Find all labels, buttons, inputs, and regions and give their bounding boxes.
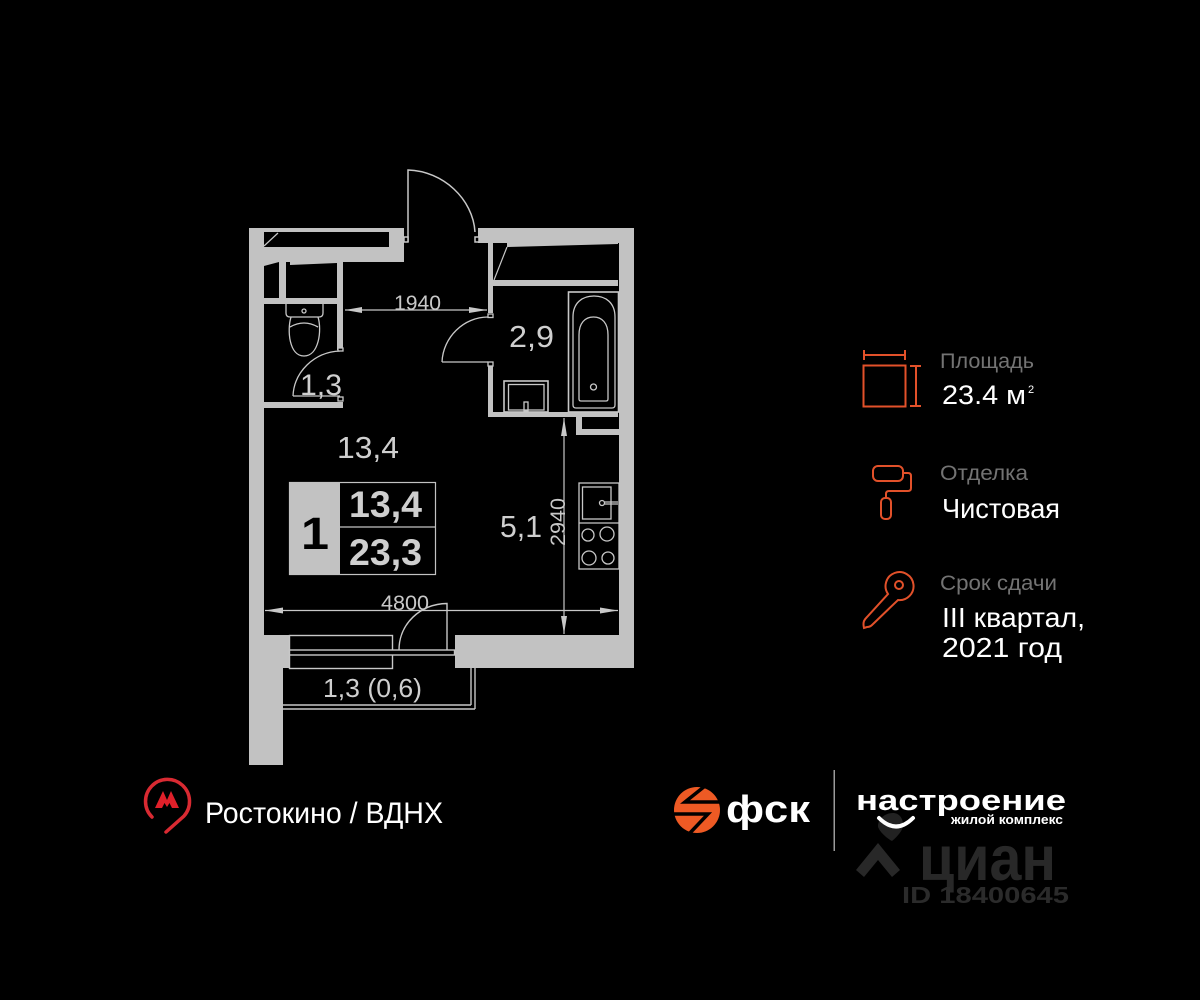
room areas	[300, 319, 554, 703]
dimension 1940: 1940	[394, 292, 441, 315]
info: delivery date: Срок сдачи	[940, 572, 1057, 595]
info: finish: Чистовая	[942, 493, 1060, 524]
room areas: 1,3	[300, 369, 342, 402]
entrance door	[264, 170, 507, 280]
icon: area	[864, 350, 921, 406]
info: area: 2	[1028, 384, 1034, 396]
room areas: 1,3 (0,6)	[323, 673, 422, 703]
watermark: cian: циан	[919, 824, 1056, 894]
apartment legend box: 1	[301, 508, 329, 559]
logo: FSK: фск	[726, 789, 811, 831]
info: finish: Отделка	[940, 462, 1028, 485]
room areas: 2,9	[509, 319, 554, 354]
bathtub	[568, 292, 618, 412]
dimension 4800: 4800	[381, 592, 429, 615]
dimension 1940	[345, 292, 487, 315]
toilet room	[286, 304, 343, 401]
icon: metro pin	[146, 779, 190, 832]
info: area	[864, 350, 1034, 410]
icon: key	[864, 572, 914, 628]
info: finish	[873, 462, 1060, 524]
dimension 2940: 2940	[547, 498, 570, 546]
watermark: cian	[856, 813, 1069, 908]
divider	[834, 770, 835, 851]
floor plan	[249, 170, 634, 765]
info: area: Площадь	[940, 350, 1034, 373]
logo: Nastroenie	[856, 785, 1066, 827]
metro station: Ростокино / ВДНХ	[205, 797, 443, 830]
info: area: 23.4 м	[942, 380, 1026, 410]
icon: FSK circle	[673, 786, 720, 834]
dimension 4800	[265, 592, 618, 615]
walls	[249, 228, 634, 765]
icon: cian pin	[856, 813, 903, 877]
metro station	[146, 779, 443, 832]
apartment legend box	[289, 482, 436, 575]
info: delivery date	[864, 572, 1085, 663]
apartment legend box: 13,4	[349, 484, 422, 525]
bathroom door	[442, 314, 493, 366]
room areas: 13,4	[337, 430, 399, 465]
logo: Nastroenie: настроение	[856, 785, 1066, 817]
apartment legend box: 23,3	[349, 532, 422, 573]
room areas: 5,1	[500, 509, 542, 544]
info: delivery date: 2021 год	[942, 632, 1062, 663]
window and balcony door	[249, 604, 475, 765]
info: delivery date: III квартал,	[942, 602, 1085, 633]
logo: FSK	[673, 786, 811, 834]
icon: smile	[879, 818, 913, 826]
logo: Nastroenie: жилой комплекс	[950, 812, 1063, 827]
watermark: cian: ID 18400645	[902, 882, 1069, 908]
dimension 2940	[547, 418, 570, 634]
kitchen	[579, 483, 619, 569]
icon: paint roller	[873, 466, 911, 519]
bathroom sink	[504, 381, 548, 412]
